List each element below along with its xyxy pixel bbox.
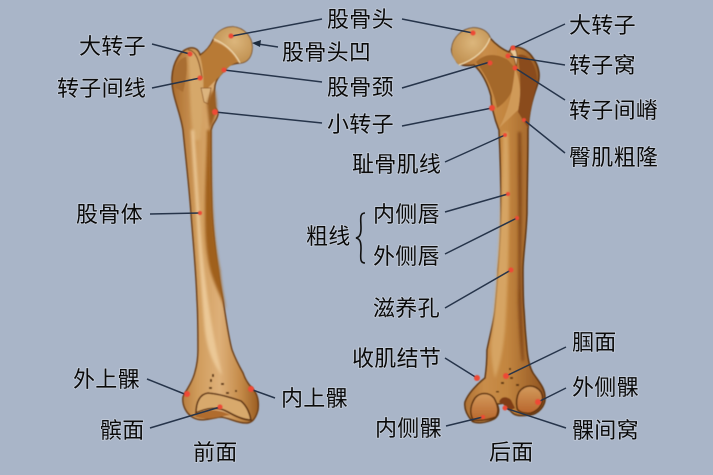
labels: 内侧唇: [373, 202, 440, 227]
femoral head cap: [213, 27, 252, 63]
labels: 收肌结节: [352, 346, 441, 371]
posterior femur: [452, 28, 545, 423]
labels: 粗线: [306, 224, 351, 249]
labels: 外上髁: [73, 367, 140, 392]
labels: 股骨头凹: [282, 40, 371, 65]
anterior femur: [172, 27, 258, 423]
shaft stripes: [491, 132, 509, 378]
labels: 臀肌粗隆: [569, 145, 658, 170]
labels: 转子间嵴: [569, 98, 658, 123]
labels: 小转子: [327, 112, 394, 137]
crest mark: [201, 88, 211, 104]
nutrient pits: [209, 374, 237, 394]
labels: 耻骨肌线: [352, 152, 441, 177]
labels: 腘面: [572, 330, 617, 355]
labels: 大转子: [79, 34, 146, 59]
labels: 股骨体: [76, 202, 143, 227]
leader lines: [147, 19, 566, 428]
greater trochanter: [173, 57, 187, 92]
intertrochanteric fossa: [476, 55, 515, 108]
labels: 大转子: [569, 13, 636, 38]
labels: 髁间窝: [572, 418, 639, 443]
shaft shading: [205, 130, 226, 310]
labels: 转子窝: [569, 53, 636, 78]
femoral head cap: [452, 28, 490, 65]
nutrient pits: [496, 368, 519, 392]
labels: 外侧唇: [373, 244, 440, 269]
labels: 滋养孔: [373, 296, 440, 321]
condyles: [471, 394, 498, 420]
labels: 内侧髁: [375, 416, 442, 441]
labels: 髌面: [100, 418, 145, 443]
neck shading: [200, 41, 238, 92]
gluteal tuberosity: [518, 55, 537, 128]
labels: 内上髁: [281, 386, 348, 411]
labels: 股骨颈: [327, 75, 394, 100]
patellar surface: [196, 393, 251, 420]
labels: 外侧髁: [572, 375, 639, 400]
lesser trochanter shade: [207, 90, 217, 132]
arrow: femoral head fovea: [252, 40, 278, 47]
labels: 后面: [489, 440, 534, 465]
labels: 前面: [193, 440, 238, 465]
labels: 转子间线: [57, 76, 146, 101]
marker dots: [184, 30, 541, 419]
brace: [356, 213, 365, 263]
labels: 股骨头: [327, 7, 394, 32]
